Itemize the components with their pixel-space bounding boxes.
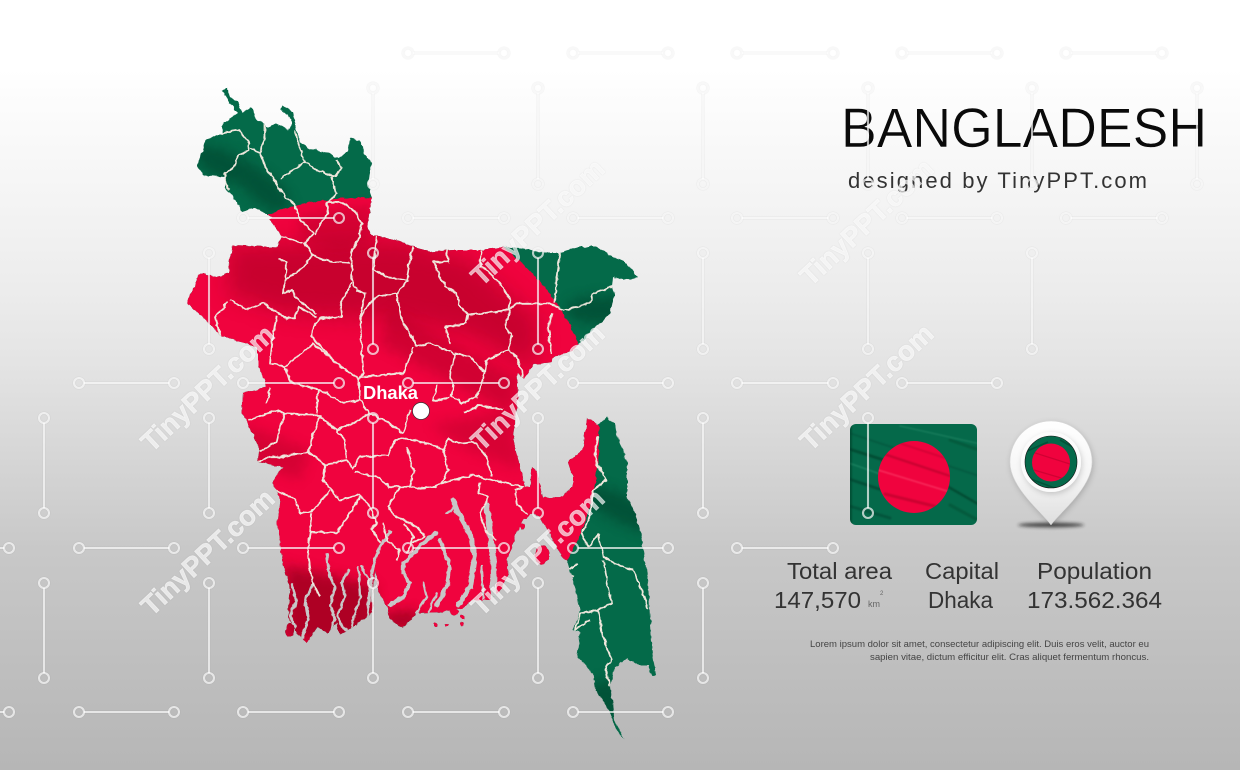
capital value: Dhaka	[928, 587, 993, 613]
map red wave shading	[228, 205, 540, 640]
description text: sapien vitae, dictum efficitur elit. Cras aliquet fermentum rhoncus.	[870, 652, 1149, 663]
Dhaka dot	[412, 402, 430, 420]
map flag red disc	[187, 197, 600, 643]
pin ground shadow	[1018, 523, 1084, 527]
flag green field	[850, 424, 977, 525]
pin red disc	[1032, 444, 1070, 482]
flag disc highlights	[878, 440, 950, 510]
stat: total area	[774, 558, 892, 613]
watermarks	[135, 153, 939, 622]
flag wave shading	[850, 425, 977, 524]
map of Bangladesh in flag colours	[187, 88, 656, 740]
district borders south	[248, 410, 648, 687]
area unit: km	[868, 599, 880, 609]
Dhaka marker and label	[363, 383, 430, 420]
population label: Population	[1037, 558, 1152, 584]
description text	[810, 639, 1149, 663]
map flag green field	[187, 88, 656, 740]
watermarks: TinyPPT.com	[465, 483, 610, 622]
subtitle: designed by TinyPPT.com	[848, 168, 1147, 193]
watermarks: TinyPPT.com	[135, 319, 280, 458]
pin disc waves	[1034, 452, 1070, 478]
stat: capital	[925, 558, 999, 613]
pin inner disc	[1021, 432, 1081, 492]
title: BANGLADESH	[841, 96, 1207, 159]
watermarks: TinyPPT.com	[794, 318, 939, 457]
watermarks: TinyPPT.com	[465, 153, 610, 292]
total area label: Total area	[787, 558, 892, 584]
map green shading	[187, 138, 676, 720]
pin flag roundel	[1025, 436, 1078, 490]
watermarks: TinyPPT.com	[794, 153, 939, 292]
pin body	[1010, 421, 1092, 525]
population value: 173.562.364	[1027, 587, 1162, 613]
icon: Bangladesh flag	[846, 424, 985, 525]
total area value: 147,570	[774, 587, 861, 613]
delta rivers	[290, 500, 513, 638]
description text: Lorem ipsum dolor sit amet, consectetur adipiscing elit. Duis eros velit, auctor eu	[810, 639, 1149, 650]
icon: map pin with flag	[1010, 421, 1092, 527]
area unit exponent: 2	[880, 591, 884, 597]
capital label: Capital	[925, 558, 999, 584]
stat: population	[1027, 558, 1162, 613]
watermarks: TinyPPT.com	[465, 318, 610, 457]
watermarks: TinyPPT.com	[135, 483, 280, 622]
roundel waves	[1027, 440, 1072, 488]
district borders north	[215, 123, 613, 413]
Dhaka label: Dhaka	[363, 383, 419, 403]
flag red disc	[878, 441, 950, 513]
